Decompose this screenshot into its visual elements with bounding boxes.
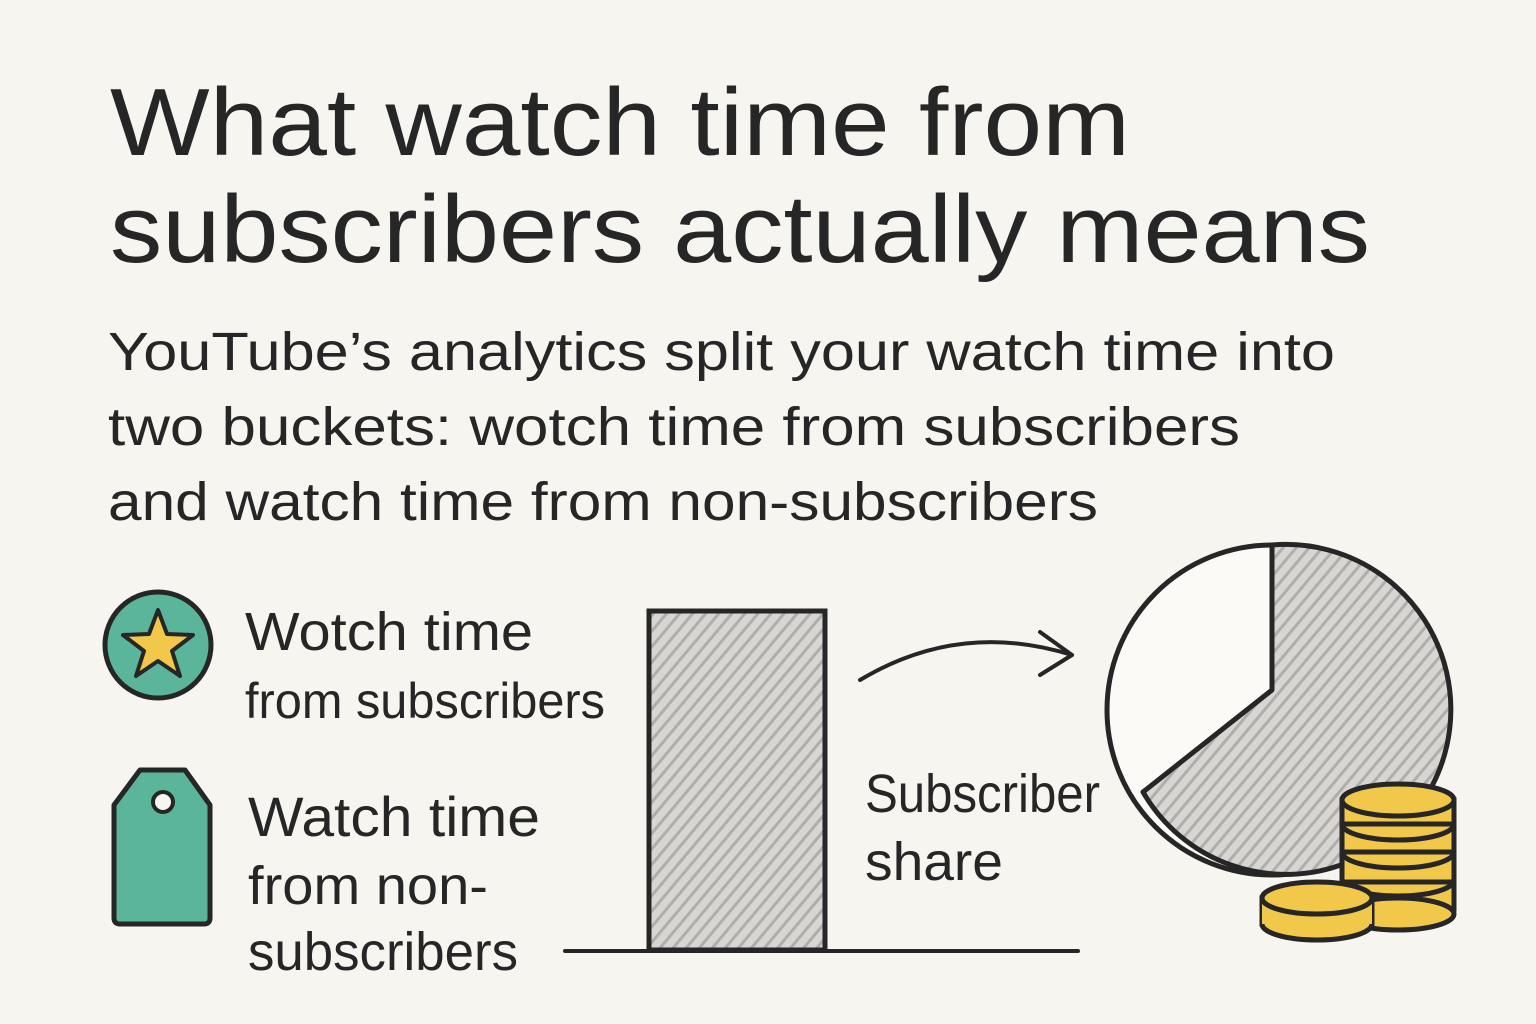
pie chart: [1107, 544, 1451, 875]
icon: coins: [1262, 784, 1454, 940]
icon: tag: [114, 770, 210, 924]
legend label: subscribers: Wotch time: [245, 602, 533, 662]
subtitle text: YouTube’s analytics split your watch time into: [108, 322, 1335, 382]
legend label: non-subscribers: subscribers: [248, 922, 518, 982]
title: What watch time from: [110, 69, 1130, 176]
bar chart: [565, 611, 1078, 951]
legend label: non-subscribers: Watch time: [248, 785, 540, 848]
subtitle text: and watch time from non-subscribers: [108, 472, 1098, 532]
legend label: non-subscribers: from non-: [248, 856, 488, 916]
label: subscriber share: [865, 764, 1100, 892]
label: subscriber share: share: [865, 832, 1003, 892]
legend label: subscribers: from subscribers: [245, 673, 605, 729]
arrow: [860, 632, 1072, 680]
legend label: non-subscribers: [248, 785, 540, 982]
icon: star circle: [105, 592, 211, 698]
label: subscriber share: Subscriber: [865, 764, 1100, 824]
legend label: subscribers: [245, 602, 605, 729]
subtitle text: two buckets: wotch time from subscribers: [108, 397, 1240, 457]
subtitle text: [108, 322, 1335, 532]
title: [110, 69, 1370, 283]
title: subscribers actually means: [110, 176, 1370, 283]
